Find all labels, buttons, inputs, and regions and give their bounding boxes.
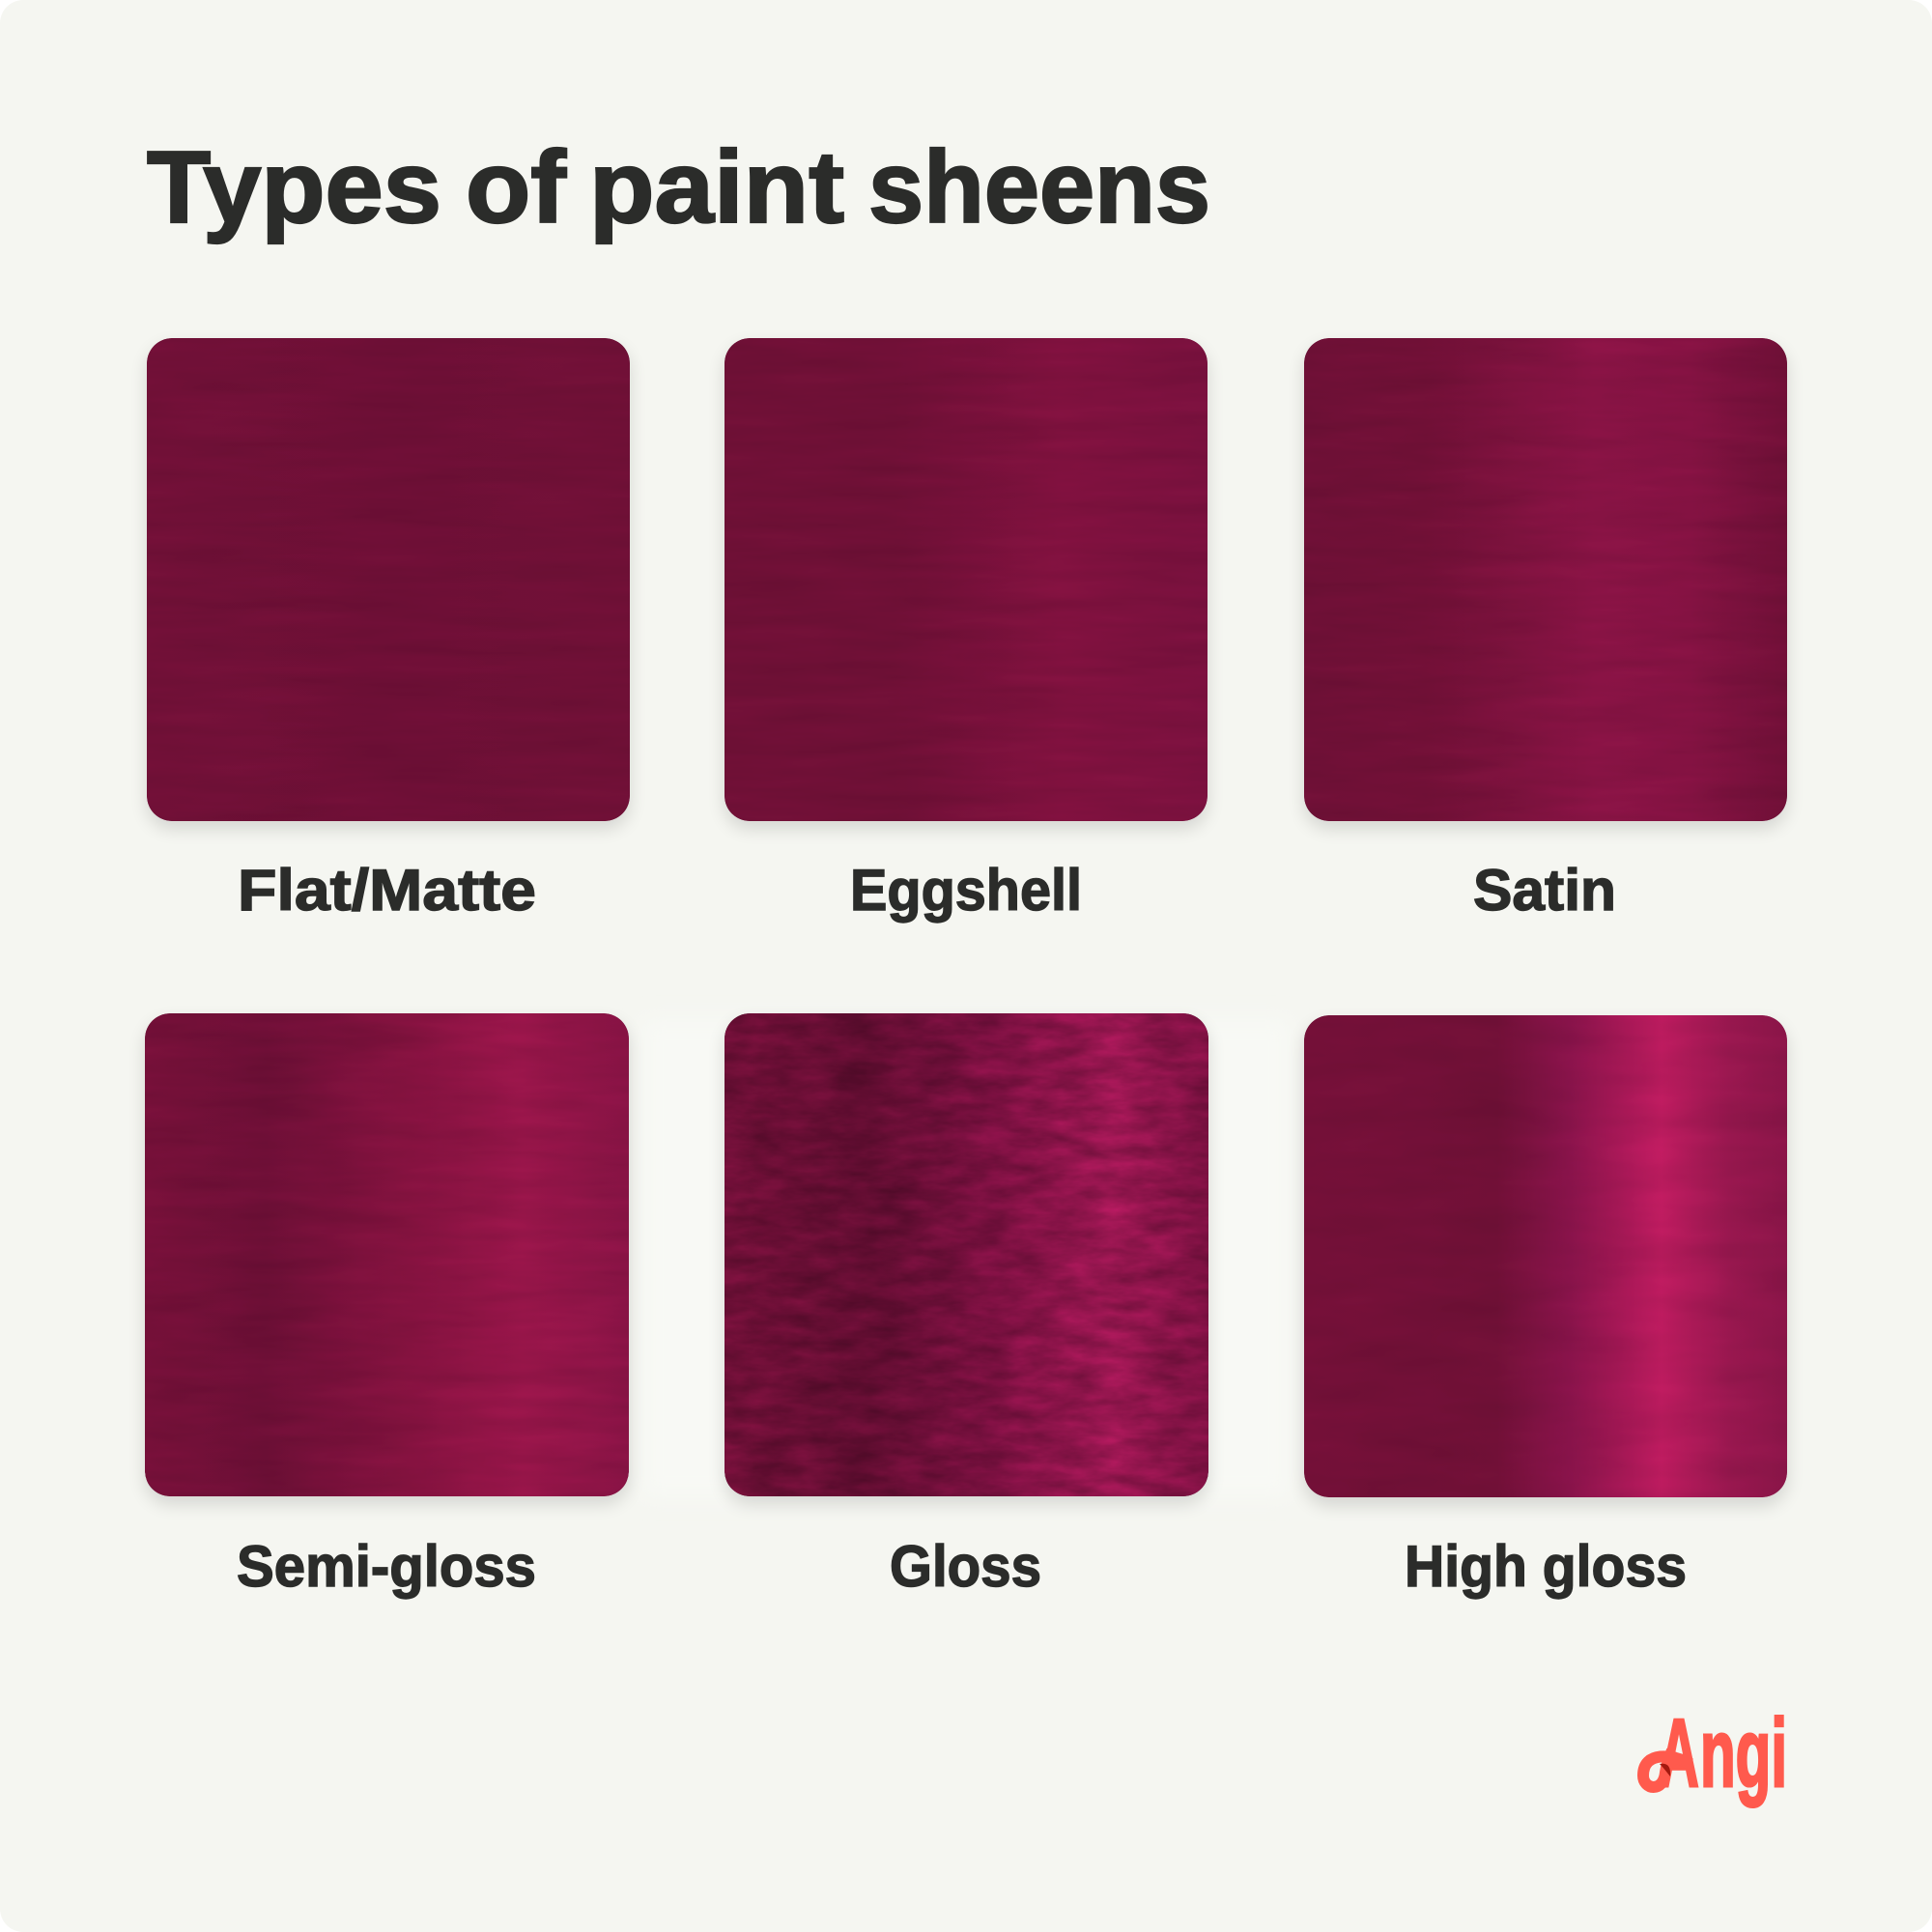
logo: Angi: A	[1659, 1699, 1699, 1807]
panel: Gloss	[724, 1013, 1208, 1599]
label: Flat/Matte: Flat/Matte	[238, 858, 536, 923]
panel: High gloss	[1304, 1015, 1787, 1599]
swatch: Gloss	[724, 1013, 1208, 1496]
title: sheens	[868, 130, 1210, 244]
label: Semi-gloss: Semi-gloss	[237, 1534, 536, 1599]
label: Eggshell: Eggshell	[850, 858, 1082, 923]
title: of	[466, 130, 567, 244]
panel: Eggshell	[724, 338, 1208, 923]
swatch: Eggshell	[724, 338, 1208, 821]
label: Gloss: Gloss	[890, 1534, 1041, 1599]
swatch: High gloss	[1304, 1015, 1787, 1497]
panel: Satin	[1304, 338, 1787, 923]
logo: Angi: ngi	[1700, 1699, 1787, 1807]
panel: Flat/Matte	[147, 338, 630, 923]
title	[147, 130, 1210, 244]
label: High gloss: High gloss	[1405, 1534, 1687, 1599]
title: Types	[147, 130, 441, 244]
label: Satin: Satin	[1473, 858, 1616, 923]
logo: Angi	[1643, 1699, 1787, 1807]
title: paint	[589, 130, 844, 244]
panel: Semi-gloss	[145, 1013, 629, 1599]
swatch: Flat/Matte	[147, 338, 630, 821]
swatch: Semi-gloss	[145, 1013, 629, 1496]
swatch: Satin	[1304, 338, 1787, 821]
